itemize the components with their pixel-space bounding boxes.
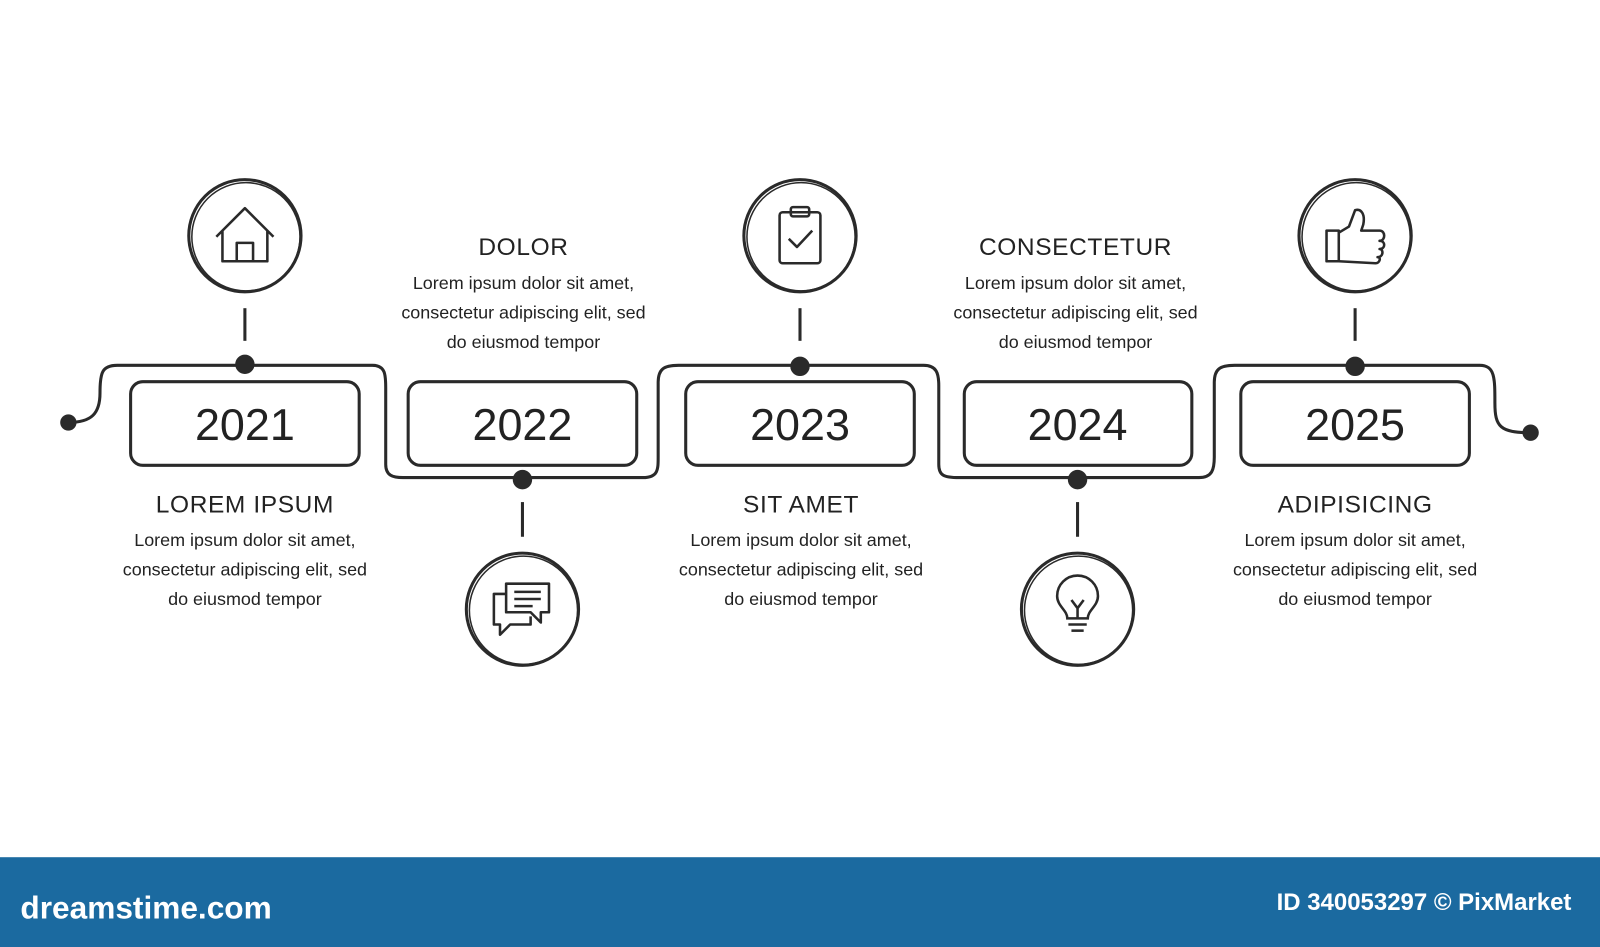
text block: DOLOR: consectetur adipiscing elit, sed	[401, 302, 646, 322]
text block: LOREM IPSUM: Lorem ipsum dolor sit amet,	[134, 530, 356, 550]
text block: ADIPISICING: consectetur adipiscing elit, sed	[1233, 560, 1477, 580]
text block: ADIPISICING: Lorem ipsum dolor sit amet,	[1244, 530, 1466, 550]
text block: CONSECTETUR: Lorem ipsum dolor sit amet,	[965, 273, 1186, 293]
text block: SIT AMET: consectetur adipiscing elit, sed	[679, 560, 923, 580]
year labels: 2025	[1305, 399, 1405, 450]
text block: DOLOR	[401, 234, 646, 352]
text block: DOLOR: DOLOR	[478, 234, 569, 261]
year labels: 2021	[195, 399, 295, 450]
year boxes	[131, 382, 1469, 465]
text block: CONSECTETUR	[953, 234, 1198, 352]
text block: SIT AMET: SIT AMET	[743, 491, 859, 518]
footer bar: ID 340053297 © PixMarket	[1277, 889, 1571, 916]
icon: house	[216, 208, 273, 261]
text block: ADIPISICING: do eiusmod tempor	[1278, 589, 1432, 609]
timeline path	[60, 365, 1539, 478]
icon: thumbs up	[1327, 210, 1384, 263]
text block: LOREM IPSUM: consectetur adipiscing elit, sed	[123, 560, 367, 580]
text block: LOREM IPSUM	[123, 491, 367, 609]
text block: SIT AMET: Lorem ipsum dolor sit amet,	[690, 530, 912, 550]
text block: SIT AMET	[679, 491, 923, 609]
year labels	[195, 399, 1405, 450]
text block: LOREM IPSUM: LOREM IPSUM	[156, 491, 334, 518]
text block: CONSECTETUR: consectetur adipiscing elit, sed	[953, 302, 1198, 322]
year labels: 2022	[473, 399, 572, 450]
text block: DOLOR: Lorem ipsum dolor sit amet,	[413, 273, 634, 293]
year labels: 2024	[1028, 399, 1127, 450]
text block: CONSECTETUR: do eiusmod tempor	[999, 332, 1152, 352]
connectors: dots and ticks	[237, 308, 1363, 537]
text block: ADIPISICING: ADIPISICING	[1278, 491, 1433, 518]
text block: ADIPISICING	[1233, 491, 1477, 609]
footer bar: dreamstime.com	[20, 889, 272, 925]
icon: chat	[494, 584, 549, 635]
icon: light bulb	[1057, 576, 1098, 631]
text block: DOLOR: do eiusmod tempor	[447, 332, 600, 352]
text block: SIT AMET: do eiusmod tempor	[724, 589, 878, 609]
text block: LOREM IPSUM: do eiusmod tempor	[168, 589, 322, 609]
year labels: 2023	[750, 399, 850, 450]
footer bar	[0, 857, 1600, 947]
icon circles	[189, 180, 1411, 665]
icon: clipboard	[780, 207, 820, 263]
text block: CONSECTETUR: CONSECTETUR	[979, 234, 1172, 261]
